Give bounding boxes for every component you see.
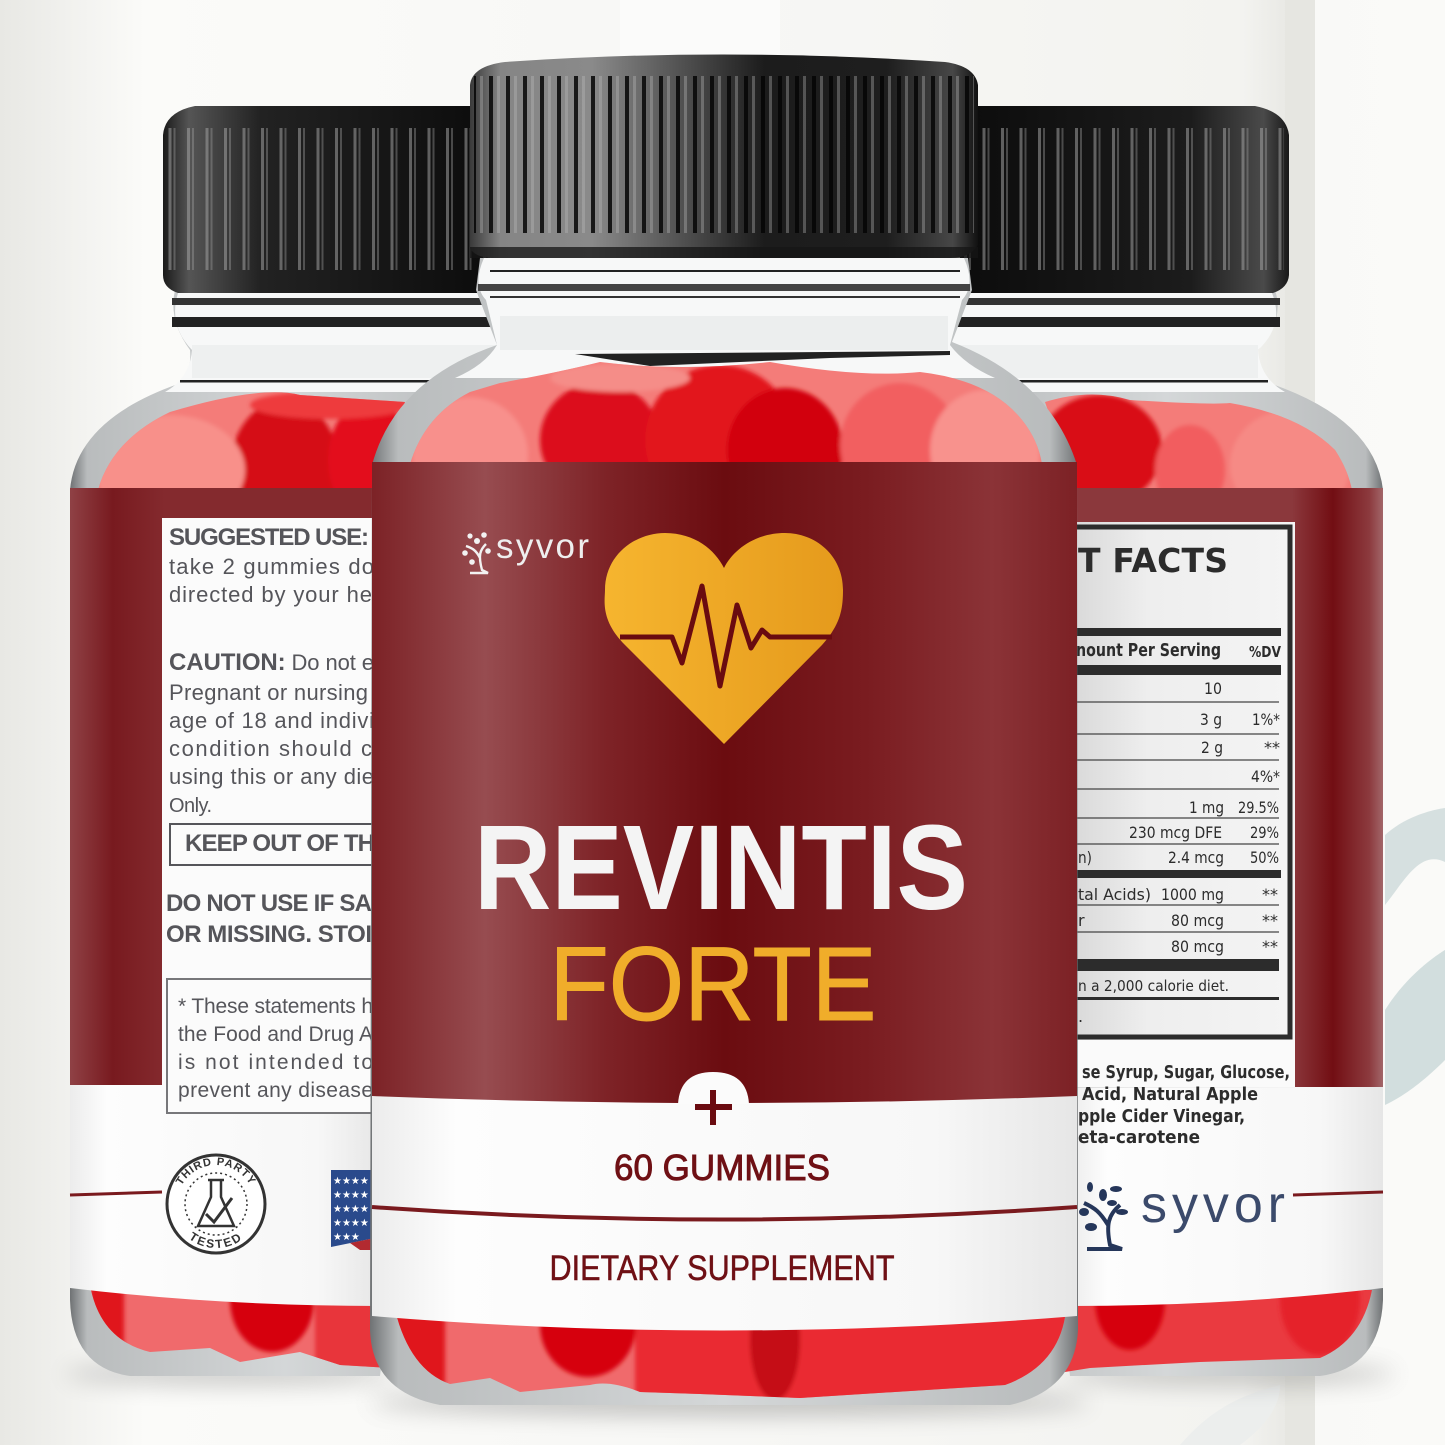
facts table: 29.5% [1238,798,1279,817]
facts table: 29% [1250,823,1279,842]
facts table: 2 g [1201,738,1223,757]
left bottle label [70,488,375,1306]
right bottle neck [950,293,1285,392]
third party tested badge: THIRD PARTY [175,1158,256,1184]
facts table: 1%* [1252,710,1280,729]
flag: ★★★★ [333,1218,369,1229]
caution text [169,649,374,817]
center bottle neck [455,258,995,378]
ingredients text: se Syrup, Sugar, Glucose, [1082,1062,1290,1083]
caution text: condition should c [169,736,372,761]
warning text [166,890,372,948]
facts table: 10 [1204,679,1222,698]
warning text: DO NOT USE IF SA [166,890,372,917]
icon: plus tab [678,1072,749,1125]
center bottle cap [470,54,978,258]
suggested use text: take 2 gummies do [169,554,374,579]
facts table: ** [1264,738,1280,757]
right bottle cap [960,106,1289,293]
center bottle gummies bottom [397,1316,1065,1398]
facts table: 3 g [1200,710,1222,729]
facts table: 50% [1250,848,1279,867]
left bottle [70,106,496,1376]
disclaimer box: is not intended to [178,1051,373,1074]
right bottle gummies bottom [1065,1290,1372,1372]
caution text: Only. [169,795,212,817]
facts table: 80 mcg [1171,911,1224,930]
third party tested badge: TESTED [190,1232,240,1248]
caution text: Pregnant or nursing [169,680,368,705]
disclaimer box: * These statements h [178,995,373,1018]
left bottle gummies bottom [91,1290,380,1368]
facts table: 1000 mg [1161,885,1224,904]
flag: ★★★★ [333,1190,369,1201]
facts table: ** [1262,911,1278,930]
supplement facts heading: T FACTS [1078,541,1228,580]
caution text: age of 18 and indivi [169,708,374,733]
left bottle cap [163,106,490,293]
facts table: %DV [1249,643,1281,661]
facts table: tal Acids) [1078,885,1151,904]
facts table: n) [1078,848,1092,867]
center bottle gummies top [410,362,1042,462]
count: 60 GUMMIES [614,1147,830,1188]
center white label [372,1096,1077,1330]
flag: ★★★★ [333,1204,369,1215]
facts table: 1 mg [1189,798,1224,817]
facts table: 2.4 mcg [1168,848,1224,867]
icon: heart with pulse [605,533,843,744]
flag: ★★★ [333,1232,360,1243]
ingredients text [1078,1062,1290,1148]
facts table: nount Per Serving [1076,640,1221,661]
caution text: using this or any die [169,764,374,789]
keep out box [170,824,390,865]
right bottle [950,106,1383,1376]
facts table: ** [1262,937,1278,956]
right bottle glass [950,290,1383,1376]
disclaimer box: prevent any disease [178,1079,373,1102]
center bottle glass [370,258,1078,1405]
ingredients text: Acid, Natural Apple [1082,1084,1258,1105]
ingredients text: eta-carotene [1078,1127,1200,1148]
warning text: OR MISSING. STOI [166,921,372,948]
ingredients text: pple Cider Vinegar, [1078,1106,1245,1127]
syvor logo: syvor [496,527,589,566]
center red label [372,462,1077,1104]
facts table: 230 mcg DFE [1129,823,1222,842]
syvor logo right [1079,1176,1383,1249]
suggested use text [169,524,374,607]
facts table [1070,628,1281,1026]
left bottle neck [165,293,500,392]
right bottle label [1070,488,1383,1306]
flag: ★★★★ [333,1176,369,1187]
flag [331,1170,375,1250]
suggested use text: SUGGESTED USE: [169,524,369,551]
facts table: ** [1262,885,1278,904]
facts table: . [1078,1007,1083,1026]
disclaimer box: the Food and Drug A [178,1023,373,1046]
facts table: n a 2,000 calorie diet. [1078,977,1229,995]
facts table: 80 mcg [1171,937,1224,956]
caution text: CAUTION: Do not e [169,649,374,676]
right bottle gummies top [1045,394,1352,488]
supplement line: DIETARY SUPPLEMENT [550,1249,894,1288]
disclaimer box [167,979,387,1113]
product subtitle: FORTE [550,926,876,1043]
syvor logo [462,527,589,573]
third party tested badge [70,1154,266,1254]
center bottle [370,54,1078,1405]
facts table: r [1078,911,1085,930]
keep out box: KEEP OUT OF TH [185,830,375,857]
divider [372,1207,1077,1220]
syvor logo right: syvor [1141,1176,1285,1234]
left bottle glass [70,290,500,1376]
facts table: 4%* [1251,767,1280,786]
left bottle gummies top [98,392,405,488]
suggested use text: directed by your he [169,582,372,607]
product name: REVINTIS [474,799,968,935]
